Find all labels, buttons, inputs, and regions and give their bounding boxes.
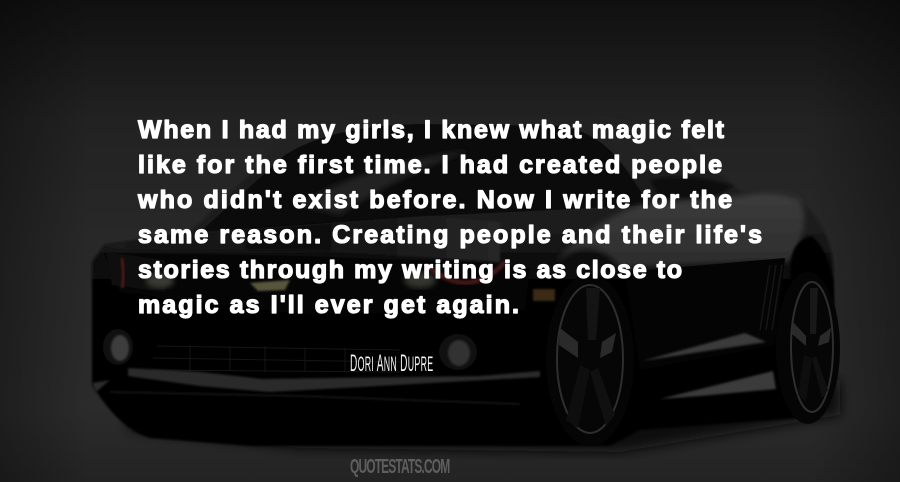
windshield reflection: [300, 150, 470, 215]
bumper corner: [92, 380, 110, 392]
lower grille: [152, 345, 400, 372]
front grille opening: [104, 253, 530, 314]
quote text: [137, 116, 762, 319]
badge: [250, 280, 290, 291]
right fog lamp: [439, 334, 477, 370]
quote line 4: same reason. Creating people and their life's: [138, 221, 762, 249]
windshield: [200, 124, 650, 232]
quote line 2: like for the first time. I had created people: [138, 151, 722, 179]
car body: [92, 115, 836, 446]
rear wheel arch: [790, 236, 833, 300]
quote line 1: When I had my girls, I knew what magic felt: [138, 116, 725, 144]
door shadow: [625, 258, 785, 370]
lower lip: [110, 392, 520, 404]
side skirt upper blade: [642, 333, 766, 361]
ground shadow: [130, 380, 840, 452]
watermark: QUOTESTATS.COM: [350, 456, 450, 478]
side window: [650, 177, 733, 200]
side panel highlight: [555, 193, 804, 268]
front wheel: [546, 274, 634, 446]
author: DORI ANN DUPRE: [350, 349, 433, 376]
side skirt lower blade: [660, 371, 776, 399]
rear wheel: [776, 272, 840, 424]
left headlight: [106, 252, 174, 292]
right headlight: [404, 262, 505, 288]
left fog lamp: [103, 329, 133, 365]
hood: [104, 216, 500, 262]
quote line 6: magic as I'll ever get again.: [138, 291, 519, 319]
quote line 5: stories through my writing is as close to: [138, 256, 682, 284]
rear vents: [760, 265, 782, 330]
front bumper lip: [128, 368, 540, 392]
quote line 3: who didn't exist before. Now I write for the: [137, 186, 732, 214]
indicator: [533, 289, 555, 301]
car illustration: [92, 115, 840, 452]
